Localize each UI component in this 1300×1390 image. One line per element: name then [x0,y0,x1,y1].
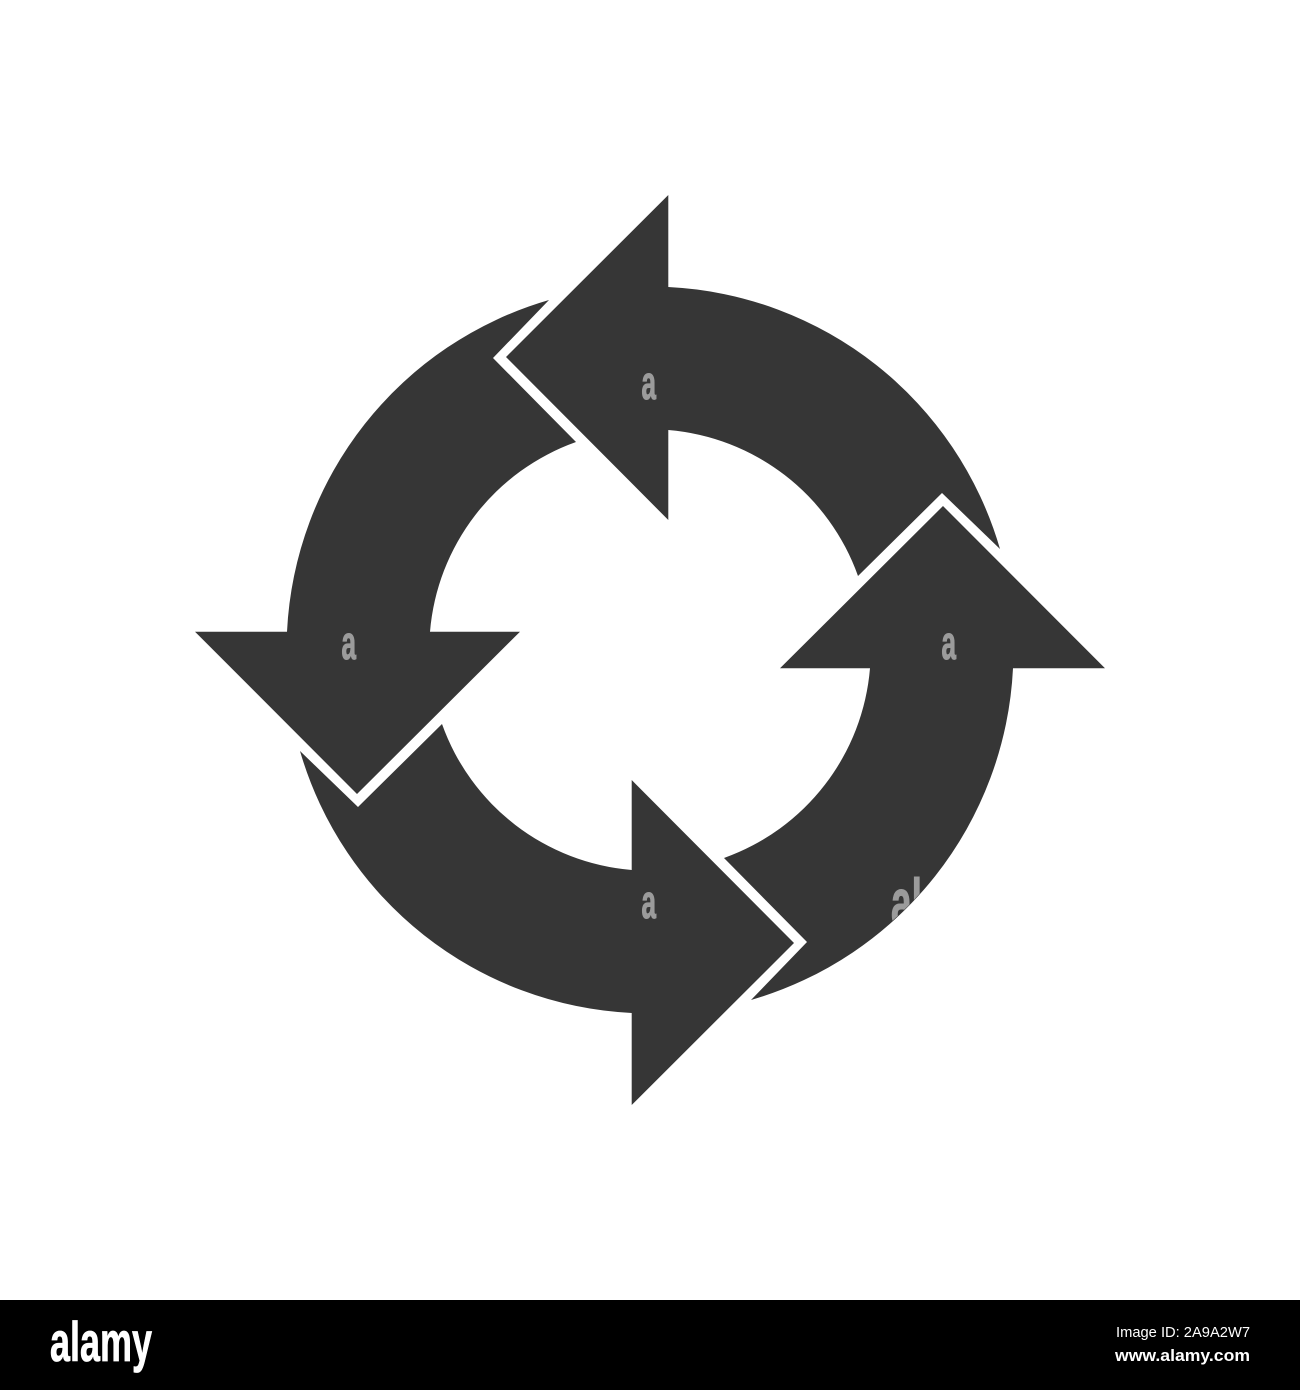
footer bar [0,1300,1300,1390]
arrow: right, pointing up [724,506,1105,1000]
watermark glyphs over the arrows: al [891,865,922,939]
arrow: bottom, pointing right [300,724,794,1105]
arrow: top, pointing left [506,195,1000,576]
arrow: left, pointing down [195,300,576,794]
watermark glyphs over the arrows: a [642,875,656,928]
footer text: website: www.alamy.com [1114,1346,1250,1365]
watermark glyphs over the arrows: a [342,616,356,669]
watermark glyphs over the arrows: a [642,356,656,409]
watermark glyphs over the arrows: a [942,616,956,669]
footer logo: alamy: alamy [50,1310,152,1373]
cycle diagram: four circular arrows [195,195,1105,1105]
footer text: image id: Image ID: 2A9A2W7 [1116,1324,1250,1341]
watermark glyphs over the arrows [342,356,956,939]
